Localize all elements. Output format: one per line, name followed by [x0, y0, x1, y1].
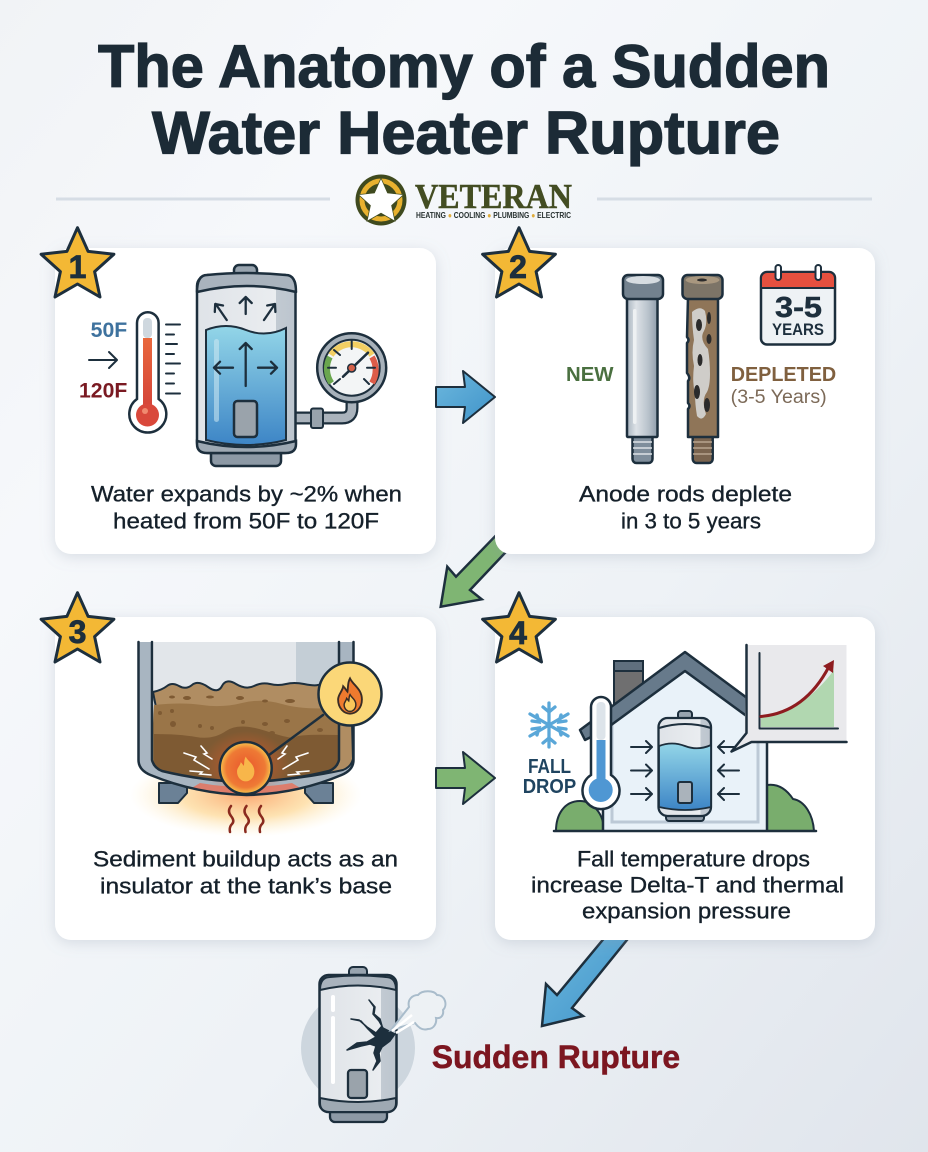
star badge 3: [41, 593, 114, 662]
arrow: step 4 to rupture: [542, 930, 635, 1026]
crack: [347, 1000, 395, 1070]
arrow: step 1 to step 2: [436, 371, 495, 423]
panel: step 1 thermal expansion: [55, 248, 436, 554]
caption: Water expands by ~2% when: [91, 482, 402, 506]
icon: depleted anode rod: [682, 275, 722, 463]
heat glow: [130, 753, 362, 837]
star badge 4: 4: [509, 615, 527, 651]
label: FALL DROP: FALL: [528, 756, 571, 778]
icon: house: [554, 652, 816, 831]
icon: sparks: [184, 746, 309, 775]
label: FALL DROP: [523, 756, 576, 798]
logo: Veteran: [356, 174, 572, 226]
label: 120F: 120F: [79, 380, 127, 402]
caption: insulator at the tank’s base: [100, 874, 392, 898]
title: The Anatomy of a Sudden: [98, 33, 830, 100]
chart: pressure curve callout: [732, 645, 846, 752]
heading: Sudden Rupture: Sudden Rupture: [432, 1039, 680, 1075]
icon: star badge: [356, 174, 406, 226]
label: FALL DROP: DROP: [523, 776, 576, 798]
caption: increase Delta-T and thermal: [531, 872, 844, 898]
icon: tank feet: [159, 783, 333, 803]
label: DEPLETED: DEPLETED: [731, 363, 836, 386]
icon: hot spot: [220, 742, 272, 794]
icon: tank cross-section: [138, 642, 354, 799]
icon: calendar: YEARS: [772, 320, 824, 339]
caption: in 3 to 5 years: [621, 508, 761, 534]
icon: pressure pipe: [296, 400, 352, 428]
icon: calendar: 3-5: [775, 292, 822, 324]
caption: [579, 482, 792, 534]
icon: pressure arrows: [631, 741, 739, 800]
steam: [391, 991, 445, 1030]
title: Water Heater Rupture: [152, 100, 780, 166]
icon: snowflake: [530, 703, 568, 747]
label: 50F: 50F: [91, 319, 127, 342]
arrow: step 2 to step 3: [441, 524, 520, 607]
star badge 1: 1: [69, 249, 86, 285]
icon: water heater tank: [197, 265, 296, 466]
icon: calendar: [761, 265, 835, 344]
arrow: step 3 to step 4: [436, 752, 495, 804]
logo: Veteran: HEATING ● COOLING ● PLUMBING ● ELECTRIC: [416, 211, 571, 220]
caption: Anode rods deplete: [579, 482, 792, 506]
star badge 2: 2: [509, 249, 527, 285]
label: 3-5 Years: (3-5 Years): [731, 387, 827, 408]
panel: step 4 fall temperature: [495, 617, 875, 940]
caption: [91, 482, 402, 534]
icon: new anode rod: [623, 275, 663, 463]
label: NEW: NEW: [566, 363, 614, 386]
caption: Fall temperature drops: [577, 846, 810, 872]
panel: step 3 sediment: [55, 617, 436, 940]
caption: heated from 50F to 120F: [113, 508, 379, 534]
icon: heat waves: [229, 806, 263, 832]
caption: [93, 846, 398, 898]
arrow: 50F to 120F: [89, 352, 117, 368]
icon: cold thermometer: [582, 697, 620, 809]
panel: step 2 anode rods: [495, 248, 875, 554]
caption: Sediment buildup acts as an: [93, 846, 398, 872]
icon: flame callout: [318, 662, 382, 726]
icon: ruptured water heater: [301, 967, 445, 1122]
caption: [531, 846, 844, 924]
icon: thermometer: [129, 312, 180, 433]
caption: expansion pressure: [582, 898, 791, 924]
star badge 3: 3: [69, 614, 86, 650]
title: [98, 33, 830, 166]
star badge 1: [41, 228, 114, 297]
star badge 2: [483, 228, 555, 297]
icon: pressure gauge: [317, 333, 386, 402]
icon: small water heater: [658, 711, 711, 821]
logo: Veteran: VETERAN: [415, 177, 572, 216]
star badge 4: [483, 593, 555, 662]
callout line: [269, 715, 323, 755]
